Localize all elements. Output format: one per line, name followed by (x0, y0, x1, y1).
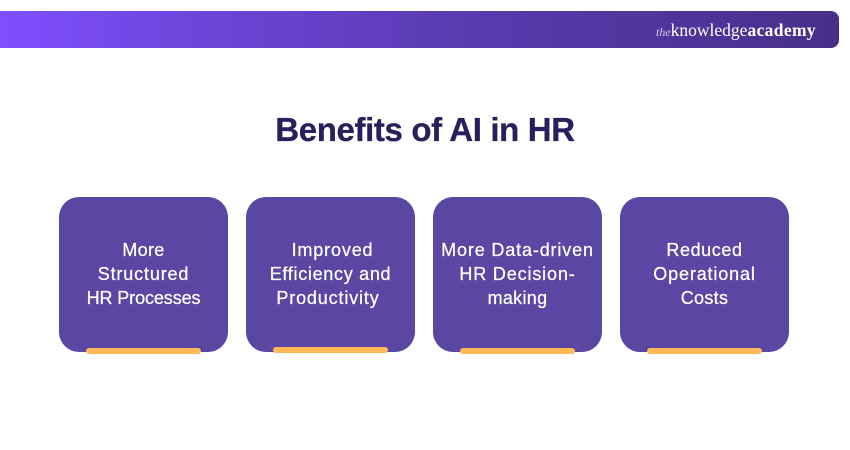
panel: more structured HR processes (59, 197, 228, 352)
header banner (0, 11, 839, 48)
panel text (270, 240, 391, 308)
panel text: Reduced (666, 240, 743, 260)
panel text: Costs (681, 288, 728, 308)
panel: more data-driven HR decision-making (433, 197, 602, 352)
accent bar (460, 348, 575, 354)
panel text: More (122, 240, 165, 260)
panel text: Operational (653, 264, 756, 284)
panel text: making (488, 288, 547, 308)
accent bar (647, 348, 762, 354)
panel text (653, 240, 756, 308)
panel text: HR Processes (87, 288, 200, 308)
logo: the knowledge academy: theknowledgeacademy (656, 20, 816, 40)
panel text: Structured (98, 264, 189, 284)
panel text: Efficiency and (270, 264, 391, 284)
panel: improved efficiency and productivity (246, 197, 415, 352)
panel text: Productivity (276, 288, 380, 308)
panel text: More Data-driven (441, 240, 594, 260)
panel: reduced operational costs (620, 197, 789, 352)
accent bar (86, 348, 201, 354)
panel text (441, 240, 594, 308)
panel text: Improved (292, 240, 373, 260)
accent bar (273, 347, 388, 353)
panel text (87, 240, 200, 308)
title: Benefits of AI in HR (275, 111, 575, 148)
panel text: HR Decision- (459, 264, 576, 284)
